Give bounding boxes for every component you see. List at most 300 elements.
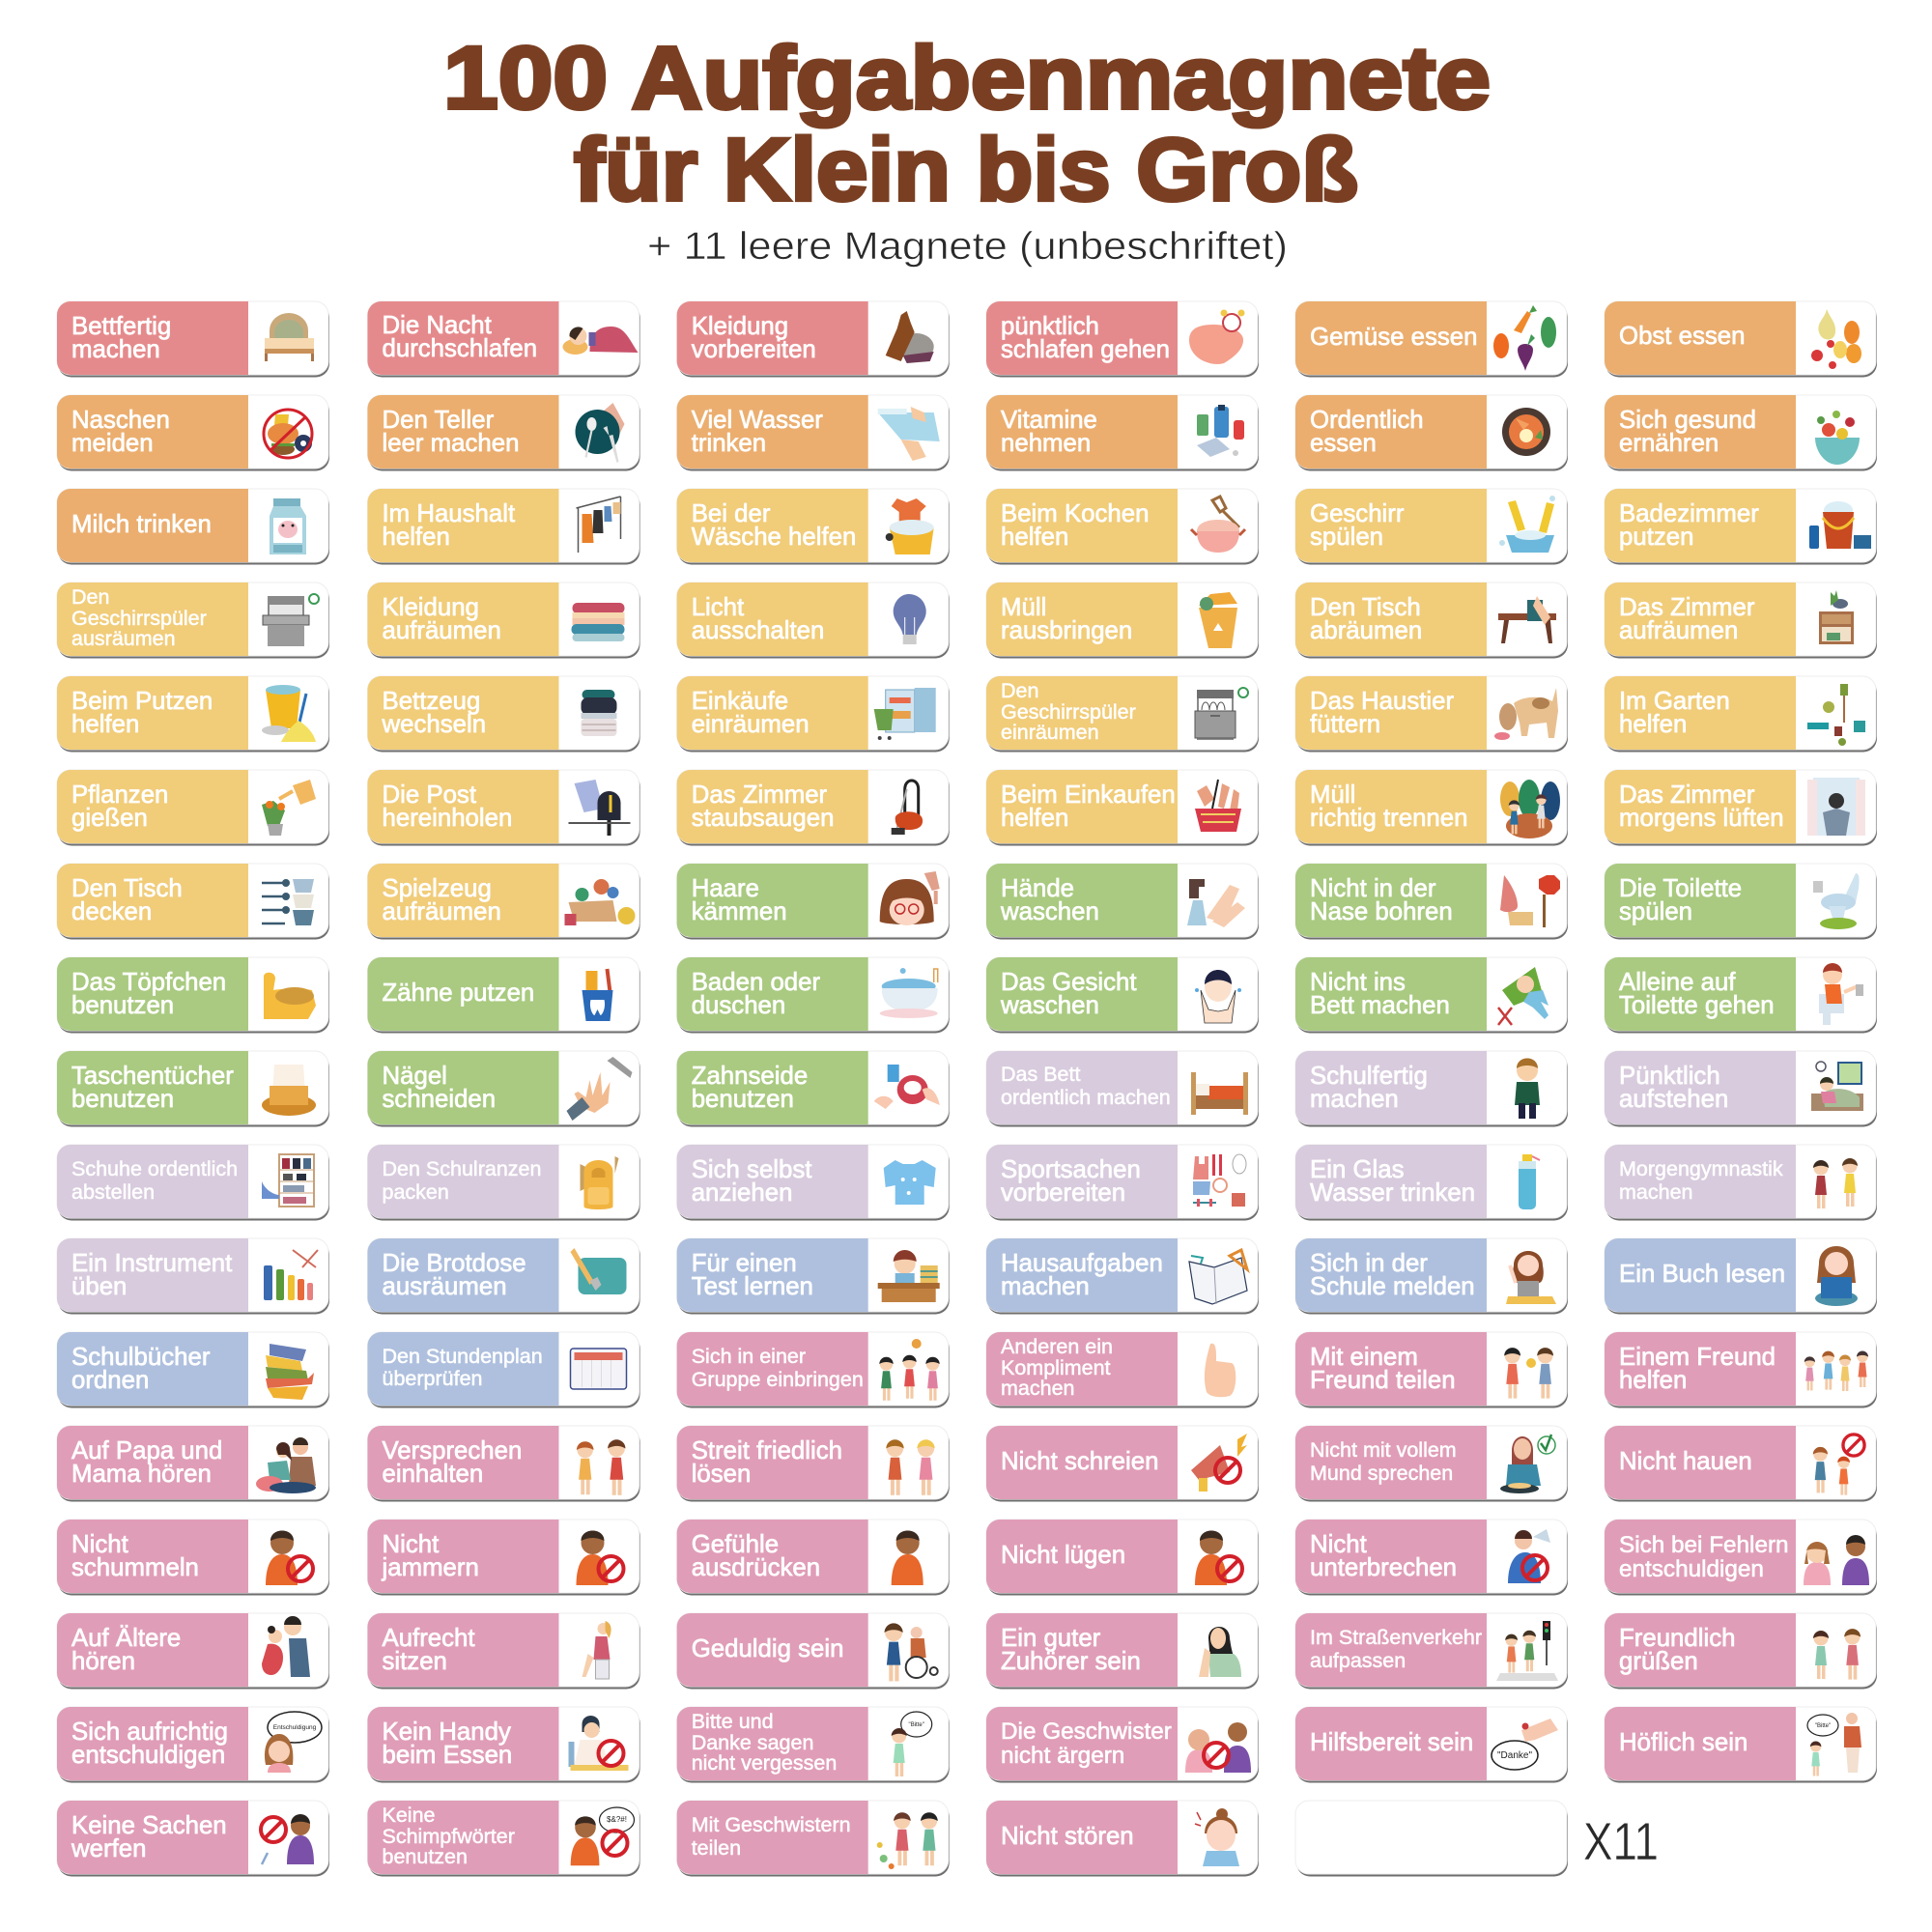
card: Die Post hereinholen: hereinholen (383, 805, 512, 832)
card: Streit friedlich lösen: lösen (692, 1461, 751, 1488)
card: Das Töpfchen benutzen (57, 957, 329, 1034)
icon: boy prohibited (576, 1530, 624, 1585)
card: Anderen ein Kompliment machen (986, 1332, 1259, 1408)
icon: children running (1813, 1158, 1858, 1208)
card: Bettfertig machen (57, 301, 329, 377)
icon: siblings with toys (877, 1812, 938, 1869)
card: Das Bett ordentlich machen (986, 1051, 1259, 1126)
card: Die Geschwister nicht ärgern (986, 1707, 1259, 1783)
card: Müll rausbringen (986, 582, 1259, 659)
card: Streit friedlich lösen: Streit friedlich (692, 1437, 842, 1464)
card: Sportsachen vorbereiten: vorbereiten (1001, 1179, 1125, 1207)
card: Den Geschirrspüler ausräumen (57, 582, 329, 659)
card: Nicht lügen: Nicht lügen (1001, 1542, 1125, 1569)
icon: sleeping child (562, 327, 638, 355)
card: Nicht mit vollem Mund sprechen (1295, 1426, 1568, 1501)
card: Sich selbst anziehen (677, 1145, 950, 1221)
icon: spoons and cups (262, 879, 314, 925)
card: Höflich sein: Höflich sein (1619, 1729, 1747, 1756)
card: Gefühle ausdrücken (677, 1520, 950, 1596)
card: Ein Instrument üben: üben (71, 1273, 127, 1300)
icon: annoyed woman (1195, 1808, 1239, 1866)
card: Das Zimmer morgens lüften: morgens lüften (1619, 805, 1784, 832)
card: Den Geschirrspüler einräumen: Geschirrspüler (1001, 700, 1136, 724)
card: Beim Kochen helfen: helfen (1001, 524, 1068, 551)
card: Sich gesund ernähren (1605, 395, 1877, 471)
card: Die Post hereinholen: Die Post (383, 781, 476, 809)
card: Mit Geschwistern teilen (677, 1801, 950, 1876)
card: Den Tisch abräumen: Den Tisch (1310, 594, 1421, 621)
card: Geschirr spülen: spülen (1310, 524, 1383, 551)
blank magnet (1295, 1801, 1568, 1876)
card: Für einen Test lernen: Für einen (692, 1250, 797, 1277)
card: Freundlich grüßen: Freundlich (1619, 1625, 1735, 1652)
card: Kleidung aufräumen (367, 582, 639, 659)
card: Den Tisch abräumen (1295, 582, 1568, 659)
card: Nicht stören: Nicht stören (1001, 1823, 1134, 1850)
card: Die Nacht durchschlafen: Die Nacht (383, 312, 492, 339)
card: Nicht hauen (1605, 1426, 1877, 1501)
card: Badezimmer putzen (1605, 489, 1877, 564)
card: Haare kämmen: kämmen (692, 898, 787, 925)
card: Einem Freund helfen: Einem Freund (1619, 1344, 1776, 1371)
card: Bettzeug wechseln (367, 676, 639, 752)
card: Einem Freund helfen (1605, 1332, 1877, 1408)
card: pünktlich schlafen gehen: schlafen gehen (1001, 336, 1170, 363)
title: für Klein bis Groß (574, 121, 1358, 219)
card: Das Zimmer aufräumen: Das Zimmer (1619, 594, 1755, 621)
icon: waste sorting (1500, 780, 1560, 838)
icon: woman eating (1500, 1435, 1555, 1493)
card: Das Haustier füttern: füttern (1310, 711, 1380, 738)
card: Hausaufgaben machen (986, 1238, 1259, 1314)
card: Den Geschirrspüler einräumen: Den (1001, 679, 1038, 702)
icon: potty (264, 973, 316, 1019)
card: Zähne putzen: Zähne putzen (383, 980, 534, 1007)
card: Licht ausschalten: Licht (692, 594, 744, 621)
card: Das Zimmer aufräumen (1605, 582, 1877, 659)
card: Aufrecht sitzen: Aufrecht (383, 1625, 475, 1652)
card: Auf Ältere hören (57, 1613, 329, 1689)
card: Müll rausbringen: rausbringen (1001, 617, 1132, 644)
icon: watering can (262, 780, 316, 836)
card: Sportsachen vorbereiten: Sportsachen (1001, 1156, 1141, 1183)
card: Die Brotdose ausräumen (367, 1238, 639, 1314)
icon: hand and thanks bubble: "Danke" (1497, 1750, 1532, 1761)
card: Ein Glas Wasser trinken (1295, 1145, 1568, 1221)
icon: two children (886, 1439, 935, 1495)
card: Beim Putzen helfen (57, 676, 329, 752)
card: Sich gesund ernähren: Sich gesund (1619, 407, 1756, 434)
card: Pflanzen gießen: Pflanzen (71, 781, 168, 809)
card: Auf Papa und Mama hören (57, 1426, 329, 1501)
card: Kein Handy beim Essen: Kein Handy (383, 1719, 511, 1746)
icon: two children apologising (1804, 1535, 1869, 1585)
card: Ein guter Zuhörer sein: Ein guter (1001, 1625, 1101, 1652)
card: Sich in der Schule melden (1295, 1238, 1568, 1314)
card: Müll richtig trennen: richtig trennen (1310, 805, 1467, 832)
icon: clothes rack (576, 497, 620, 553)
icon: girl and woman (1807, 1713, 1861, 1776)
card: Naschen meiden: Naschen (71, 407, 170, 434)
card: Vitamine nehmen: Vitamine (1001, 407, 1097, 434)
icon: washing hands (1187, 879, 1245, 927)
card: Haare kämmen (677, 864, 950, 939)
card: pünktlich schlafen gehen: pünktlich (1001, 313, 1099, 340)
icon: plate and cutlery (576, 403, 624, 463)
icon: hand with glass (878, 407, 940, 461)
card: Mit Geschwistern teilen: Mit Geschwistern (692, 1813, 851, 1836)
card: Das Bett ordentlich machen: Das Bett (1001, 1063, 1080, 1086)
card: Sich aufrichtig entschuldigen (57, 1707, 329, 1783)
icon: boy prohibited (266, 1530, 313, 1585)
icon: bed (265, 313, 314, 361)
card: Schulbücher ordnen: ordnen (71, 1367, 149, 1394)
card: Sportsachen vorbereiten (986, 1145, 1259, 1221)
card: Beim Kochen helfen: Beim Kochen (1001, 500, 1149, 527)
card: Gemüse essen (1295, 301, 1568, 377)
card: Das Zimmer morgens lüften: Das Zimmer (1619, 781, 1755, 809)
card: Nicht schreien: Nicht schreien (1001, 1448, 1158, 1475)
card: Kein Handy beim Essen: beim Essen (383, 1742, 512, 1769)
icon: no sweets (264, 410, 312, 458)
card: Milch trinken: Milch trinken (71, 511, 212, 538)
card: Das Gesicht waschen: waschen (1000, 992, 1099, 1019)
card: Nicht unterbrechen: Nicht (1310, 1531, 1367, 1558)
icon: child in bed (1498, 967, 1548, 1025)
card: Anderen ein Kompliment machen: Kompliment (1001, 1356, 1111, 1379)
icon: milk carton (270, 498, 306, 554)
card: Müll richtig trennen (1295, 770, 1568, 846)
card: Nicht unterbrechen: unterbrechen (1310, 1554, 1457, 1581)
card: Nicht hauen: Nicht hauen (1619, 1448, 1752, 1475)
card: Schuhe ordentlich abstellen: Schuhe ordentlich (71, 1157, 238, 1180)
card: Pünktlich aufstehen: Pünktlich (1619, 1063, 1720, 1090)
icon: fridge and cart (874, 688, 936, 740)
card: Nicht mit vollem Mund sprechen: Nicht mit vollem (1310, 1438, 1457, 1462)
card: Bitte und Danke sagen nicht vergessen: nicht vergessen (692, 1751, 837, 1775)
icon: wheelchair (885, 1623, 938, 1681)
icon: waking up (1811, 1062, 1863, 1111)
icon: cleaning bucket (1809, 501, 1871, 549)
card: Sich in der Schule melden: Sich in der (1310, 1250, 1428, 1277)
icon: friends sharing (1504, 1348, 1553, 1399)
card: Bitte und Danke sagen nicht vergessen: Danke sagen (692, 1731, 813, 1754)
icon: girl sitting upright (582, 1621, 611, 1679)
card: Badezimmer putzen: Badezimmer (1619, 500, 1759, 527)
card: Im Garten helfen: Im Garten (1619, 688, 1730, 715)
card: Das Töpfchen benutzen: Das Töpfchen (71, 969, 226, 996)
icon: school boy (1515, 1059, 1540, 1119)
card: Zahnseide benutzen (677, 1051, 950, 1126)
card: Nicht unterbrechen (1295, 1520, 1568, 1596)
card: Das Gesicht waschen: Das Gesicht (1001, 969, 1136, 996)
card: Für einen Test lernen: Test lernen (692, 1273, 813, 1300)
card: Die Nacht durchschlafen (367, 301, 639, 377)
icon: lunch box (570, 1248, 626, 1294)
card: Hilfsbereit sein: Hilfsbereit sein (1310, 1729, 1473, 1756)
icon: girl and woman: "Bitte" (1815, 1723, 1831, 1729)
card: Nicht ins Bett machen (1295, 957, 1568, 1034)
card: Die Toilette spülen: Die Toilette (1619, 875, 1742, 902)
card: Bei der Wäsche helfen: Wäsche helfen (692, 524, 856, 551)
card: Bettzeug wechseln: Bettzeug (383, 688, 480, 715)
card: Versprechen einhalten: Versprechen (383, 1437, 522, 1464)
card: Taschentücher benutzen: Taschentücher (71, 1063, 234, 1090)
card: Die Brotdose ausräumen: ausräumen (383, 1273, 507, 1300)
card: Naschen meiden: meiden (71, 430, 154, 457)
icon: girl raising hand (1506, 1251, 1556, 1304)
card: Bei der Wäsche helfen: Bei der (692, 500, 771, 527)
icon: face wash (1195, 970, 1241, 1023)
card: Im Garten helfen (1605, 676, 1877, 752)
card: Im Straßenverkehr aufpassen (1295, 1613, 1568, 1689)
card: Keine Sachen werfen: werfen (71, 1835, 146, 1862)
card: Schuhe ordentlich abstellen (57, 1145, 329, 1221)
card: Zahnseide benutzen: Zahnseide (692, 1063, 808, 1090)
icon: gardening tools (1807, 684, 1865, 746)
card: Sich bei Fehlern entschuldigen (1605, 1520, 1877, 1596)
icon: adult with child (262, 1616, 310, 1677)
card: Beim Einkaufen helfen: helfen (1001, 805, 1068, 832)
card: Schulbücher ordnen: Schulbücher (71, 1344, 211, 1371)
card: Alleine auf Toilette gehen: Alleine auf (1619, 969, 1736, 996)
card: Die Toilette spülen: spülen (1619, 898, 1692, 925)
icon: dishwasher open (263, 594, 319, 646)
card: pünktlich schlafen gehen (986, 301, 1259, 377)
card: Hausaufgaben machen: machen (1001, 1273, 1090, 1300)
card: Viel Wasser trinken: Viel Wasser (692, 407, 823, 434)
icon: folded towels (572, 603, 624, 641)
card: Morgengymnastik machen: Morgengymnastik (1619, 1157, 1783, 1180)
card: Naschen meiden (57, 395, 329, 471)
card: Den Tisch abräumen: abräumen (1310, 617, 1422, 644)
card: Ein guter Zuhörer sein: Zuhörer sein (1001, 1648, 1141, 1675)
card: Spielzeug aufräumen: Spielzeug (383, 875, 492, 902)
card: Das Töpfchen benutzen: benutzen (71, 992, 174, 1019)
icon: children with ball (879, 1339, 940, 1401)
card: Den Geschirrspüler ausräumen: ausräumen (71, 627, 176, 650)
card: Den Tisch decken (57, 864, 329, 939)
card: Das Haustier füttern: Das Haustier (1310, 688, 1455, 715)
card: Kleidung vorbereiten (677, 301, 950, 377)
icon: nightstand (1819, 590, 1854, 644)
card: Sich bei Fehlern entschuldigen: entschuldigen (1619, 1556, 1764, 1582)
card: Pflanzen gießen: gießen (71, 805, 148, 832)
card: Für einen Test lernen (677, 1238, 950, 1314)
card: Den Schulranzen packen: packen (383, 1180, 449, 1204)
card: Bitte und Danke sagen nicht vergessen (677, 1707, 950, 1783)
icon: toy box (564, 879, 636, 925)
card: Anderen ein Kompliment machen: Anderen ein (1001, 1335, 1113, 1358)
icon: boy with megaphone prohibited (1508, 1529, 1550, 1583)
card: Nicht schummeln: Nicht (71, 1531, 128, 1558)
card: Nicht ins Bett machen: Nicht ins (1310, 969, 1406, 996)
card: Das Zimmer staubsaugen: staubsaugen (692, 805, 834, 832)
card: Ein Instrument üben (57, 1238, 329, 1314)
card: Nicht schreien (986, 1426, 1259, 1501)
card: Den Teller leer machen: leer machen (383, 430, 519, 457)
card: Nicht in der Nase bohren (1295, 864, 1568, 939)
card: Versprechen einhalten: einhalten (383, 1461, 483, 1488)
card: Nägel schneiden (367, 1051, 639, 1126)
icon: sport equipment (1193, 1154, 1246, 1207)
card: Im Straßenverkehr aufpassen: aufpassen (1310, 1649, 1406, 1672)
card: Schulfertig machen: machen (1310, 1086, 1399, 1113)
card: Den Geschirrspüler einräumen (986, 676, 1259, 752)
card: Die Toilette spülen (1605, 864, 1877, 939)
card: Einkäufe einräumen (677, 676, 950, 752)
card: Das Zimmer staubsaugen (677, 770, 950, 846)
card: Gefühle ausdrücken: ausdrücken (692, 1554, 820, 1581)
card: Bettzeug wechseln: wechseln (381, 711, 486, 738)
icon: nose and stop sign (1500, 875, 1560, 927)
title: 100 Aufgabenmagnete (443, 29, 1491, 128)
card: Pünktlich aufstehen: aufstehen (1619, 1086, 1728, 1113)
card: Das Zimmer morgens lüften (1605, 770, 1877, 846)
card: Hilfsbereit sein (1295, 1707, 1568, 1783)
card: Ein Buch lesen: Ein Buch lesen (1619, 1261, 1785, 1288)
card: Schulbücher ordnen (57, 1332, 329, 1408)
card: Auf Ältere hören: hören (71, 1648, 135, 1675)
icon: girl reading (1815, 1246, 1858, 1306)
card: Nicht stören (986, 1801, 1259, 1876)
card: Licht ausschalten: ausschalten (692, 617, 824, 644)
card: Keine Schimpfwörter benutzen: Schimpfwörter (383, 1825, 515, 1848)
card: Nägel schneiden: Nägel (383, 1063, 447, 1090)
icon: pot and spatula (1191, 497, 1245, 553)
card: Die Post hereinholen (367, 770, 639, 846)
icon: dog eating (1494, 688, 1558, 740)
card: Freundlich grüßen: grüßen (1619, 1648, 1698, 1675)
card: Den Teller leer machen: Den Teller (383, 407, 495, 434)
card: Nägel schneiden: schneiden (383, 1086, 496, 1113)
card: Pünktlich aufstehen (1605, 1051, 1877, 1126)
card: Hände waschen: waschen (1000, 898, 1099, 925)
icon: shoe rack (262, 1154, 314, 1207)
card: Im Garten helfen: helfen (1619, 711, 1687, 738)
card: Beim Putzen helfen: helfen (71, 711, 139, 738)
card: Den Stundenplan überprüfen: überprüfen (383, 1367, 483, 1390)
card: Mit Geschwistern teilen: teilen (692, 1836, 741, 1860)
card: Sich selbst anziehen: anziehen (692, 1179, 792, 1207)
card: Baden oder duschen: duschen (692, 992, 785, 1019)
icon: shopping basket (1195, 780, 1241, 832)
card: Auf Ältere hören: Auf Ältere (71, 1625, 181, 1652)
icon: boy prohibited (1195, 1530, 1242, 1585)
card: Hausaufgaben machen: Hausaufgaben (1001, 1250, 1163, 1277)
icon: phone prohibited (568, 1716, 628, 1771)
icon: xylophone (264, 1250, 318, 1300)
icon: thumbs up (1205, 1344, 1236, 1397)
card: Kleidung aufräumen: aufräumen (383, 617, 501, 644)
card: Sich in der Schule melden: Schule melden (1310, 1273, 1475, 1300)
card: Nicht schummeln: schummeln (71, 1554, 199, 1581)
card: Aufrecht sitzen (367, 1613, 639, 1689)
card: Ordentlich essen: Ordentlich (1310, 407, 1424, 434)
card: Taschentücher benutzen: benutzen (71, 1086, 174, 1113)
card: Vitamine nehmen: nehmen (1001, 430, 1091, 457)
card: Nicht lügen (986, 1520, 1259, 1596)
icon: boy (892, 1530, 923, 1585)
card: Ein Glas Wasser trinken: Ein Glas (1310, 1156, 1405, 1183)
card: Haare kämmen: Haare (692, 875, 759, 902)
card: Sich in einer Gruppe einbringen (677, 1332, 950, 1408)
card: Das Bett ordentlich machen: ordentlich machen (1001, 1086, 1171, 1109)
card: Nicht jammern: jammern (381, 1554, 479, 1581)
card: Auf Papa und Mama hören: Mama hören (71, 1461, 212, 1488)
icon: child throwing prohibited (261, 1814, 314, 1864)
icon: fruit (1811, 309, 1861, 369)
icon: person at window (1807, 778, 1865, 836)
card: Ein Buch lesen (1605, 1238, 1877, 1314)
card: Baden oder duschen (677, 957, 950, 1034)
card: Viel Wasser trinken (677, 395, 950, 471)
card: Kleidung vorbereiten: Kleidung (692, 313, 788, 340)
card: Die Geschwister nicht ärgern: nicht ärgern (1001, 1743, 1124, 1769)
card: Die Geschwister nicht ärgern: Die Geschwister (1001, 1719, 1172, 1745)
icon: blue shirt (884, 1160, 936, 1205)
icon: open notebook (1189, 1250, 1247, 1304)
icon: toothbrush cup (582, 969, 612, 1021)
icon: salad bowl (1815, 411, 1860, 465)
icon: bedding stack (582, 690, 616, 736)
card: Höflich sein (1605, 1707, 1877, 1783)
card: Geschirr spülen (1295, 489, 1568, 564)
icon: mailbox (568, 780, 630, 836)
card: Zahnseide benutzen: benutzen (692, 1086, 794, 1113)
card: Sich in einer Gruppe einbringen: Gruppe einbringen (692, 1368, 864, 1391)
icon: children fighting prohibited (1813, 1435, 1864, 1495)
icon: laundry bucket (886, 498, 934, 554)
card: Viel Wasser trinken: trinken (692, 430, 766, 457)
card: Nicht in der Nase bohren: Nase bohren (1310, 898, 1453, 925)
icon: trash bin (1199, 592, 1237, 648)
icon: tissue box (262, 1065, 316, 1116)
card: Sich aufrichtig entschuldigen: entschuldigen (71, 1742, 225, 1769)
icon: girl with comb (880, 871, 940, 925)
card: Bitte und Danke sagen nicht vergessen: Bitte und (692, 1710, 774, 1733)
card: Beim Kochen helfen (986, 489, 1259, 564)
card: Ordentlich essen (1295, 395, 1568, 471)
icon: timetable (570, 1349, 626, 1389)
card: Keine Sachen werfen: Keine Sachen (71, 1812, 227, 1839)
icon: boys shaking hands (577, 1439, 626, 1495)
card: Kein Handy beim Essen (367, 1707, 639, 1783)
card: Schulfertig machen (1295, 1051, 1568, 1126)
icon: washing dishes (1499, 496, 1555, 553)
card: Nicht mit vollem Mund sprechen: Mund sprechen (1310, 1462, 1453, 1485)
icon: speech bubble and girl: Entschuldigung (273, 1724, 317, 1731)
icon: school bag (580, 1156, 618, 1209)
icon: speech bubble and girl (265, 1712, 322, 1773)
card: Im Haushalt helfen (367, 489, 639, 564)
card: Geduldig sein: Geduldig sein (692, 1635, 843, 1662)
card: Den Schulranzen packen: Den Schulranzen (383, 1157, 541, 1180)
card: Spielzeug aufräumen: aufräumen (383, 898, 501, 925)
card: Die Brotdose ausräumen: Die Brotdose (383, 1250, 526, 1277)
icon: bath tub (880, 968, 938, 1018)
card: Gemüse essen: Gemüse essen (1310, 324, 1478, 351)
card: Mit einem Freund teilen (1295, 1332, 1568, 1408)
card: Hände waschen (986, 864, 1259, 939)
card: Bettfertig machen: Bettfertig (71, 313, 171, 340)
icon: clothes pile (886, 311, 934, 363)
card: Den Teller leer machen (367, 395, 639, 471)
card: Ein guter Zuhörer sein (986, 1613, 1259, 1689)
card: Das Zimmer staubsaugen: Das Zimmer (692, 781, 828, 809)
card: Aufrecht sitzen: sitzen (383, 1648, 447, 1675)
